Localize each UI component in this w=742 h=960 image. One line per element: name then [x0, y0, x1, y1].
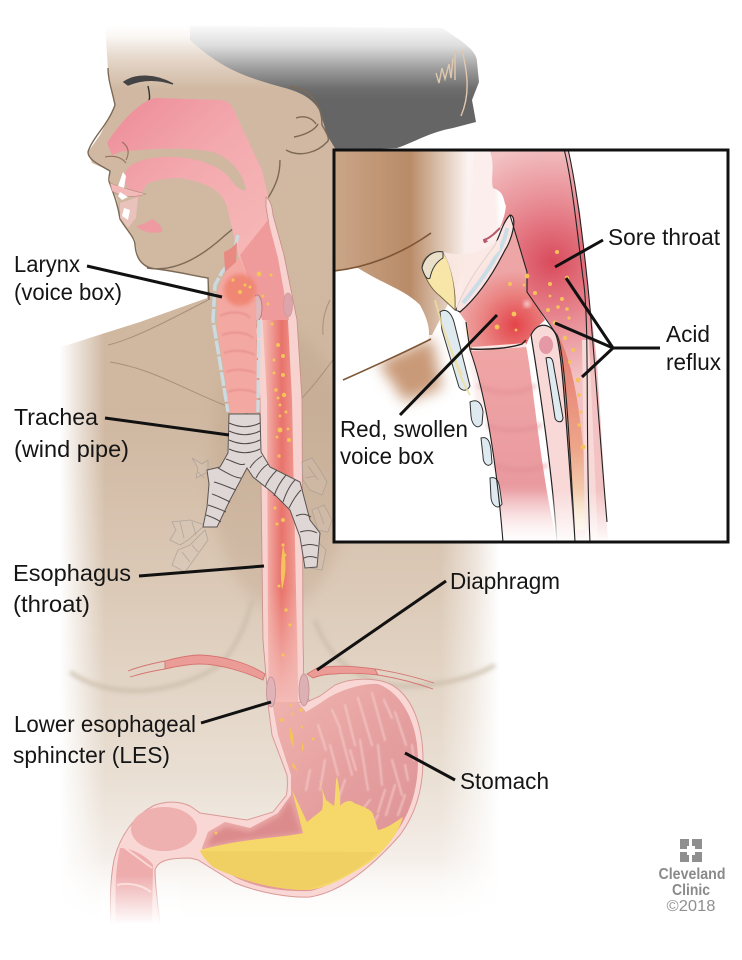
inset acid dots — [495, 250, 585, 449]
larynx red and swollen — [459, 229, 545, 350]
labels: Stomach — [460, 768, 549, 794]
acid droplets in stomach — [214, 704, 314, 834]
neck skin — [333, 149, 472, 335]
labels: reflux — [666, 349, 721, 375]
acid channel — [558, 336, 584, 530]
pharynx back wall — [489, 149, 608, 542]
shoulder and body lines — [108, 300, 333, 415]
labels: (wind pipe) — [14, 436, 129, 462]
chest folds — [70, 600, 252, 691]
labels: Lower esophageal — [14, 711, 196, 737]
labels: Trachea — [14, 404, 99, 430]
labels: (throat) — [13, 591, 90, 617]
inset panel: throat close-up — [333, 149, 729, 543]
logo: Cleveland Clinic: Cleveland — [658, 866, 726, 883]
small faded branches — [170, 458, 332, 572]
sphincter ovals lower — [266, 677, 276, 707]
sphincter ovals upper — [252, 295, 262, 321]
ear — [286, 87, 328, 154]
labels: Sore throat — [608, 224, 720, 250]
body skin silhouette — [40, 25, 520, 950]
labels: sphincter (LES) — [13, 742, 170, 768]
diaphragm — [128, 655, 434, 689]
epiglottis — [456, 215, 514, 312]
leader lines — [87, 240, 660, 780]
bottom fade of throat — [500, 492, 608, 540]
stomach folds — [306, 693, 414, 826]
trachea — [470, 346, 557, 542]
lips and teeth — [110, 183, 146, 196]
hair and bun — [190, 26, 479, 150]
jaw and chest lines — [333, 233, 431, 380]
labels — [13, 224, 721, 794]
chest skin shadow — [378, 338, 442, 402]
lower tongue patch — [136, 219, 162, 233]
tonsil jagged edge — [484, 228, 500, 242]
esophagus outlines — [466, 149, 607, 542]
pylorus bulb and duodenum folds — [131, 807, 197, 851]
palate — [120, 149, 246, 190]
throat pale tissue — [464, 152, 500, 424]
larynx and trachea — [213, 235, 272, 413]
acid fluid pool — [200, 777, 403, 890]
stomach interior — [202, 684, 418, 891]
posterior cartilage — [531, 325, 575, 542]
labels: Acid — [666, 321, 710, 347]
face features — [88, 68, 328, 300]
labels: Red, swollen — [340, 416, 468, 442]
white bay below the chin — [336, 268, 429, 368]
esophagus — [240, 197, 312, 712]
logo: Cleveland Clinic: Clinic — [672, 882, 710, 899]
hyoid and thyroid cartilage — [422, 252, 455, 310]
nostril — [105, 142, 128, 163]
labels: Larynx — [14, 251, 80, 277]
labels: Esophagus — [13, 560, 131, 586]
inset frame — [334, 150, 728, 542]
logo: Cleveland Clinic: ©2018 — [666, 898, 716, 915]
front cartilage chain — [440, 310, 502, 507]
acid dots on esophagus — [270, 322, 292, 657]
hair highlight strands — [436, 50, 467, 116]
eye and eyebrow — [137, 86, 170, 110]
labels: voice box — [340, 443, 434, 469]
stomach and duodenum — [100, 674, 423, 930]
jaw line — [147, 160, 280, 269]
logo: Cleveland Clinic — [658, 839, 726, 915]
cartilage rings — [206, 423, 318, 558]
labels: Diaphragm — [450, 568, 560, 594]
labels: (voice box) — [14, 279, 122, 305]
nasal cavity and pharynx — [105, 98, 290, 325]
bronchi — [170, 414, 332, 572]
larynx acid dots — [231, 272, 272, 306]
face outline — [88, 68, 209, 300]
